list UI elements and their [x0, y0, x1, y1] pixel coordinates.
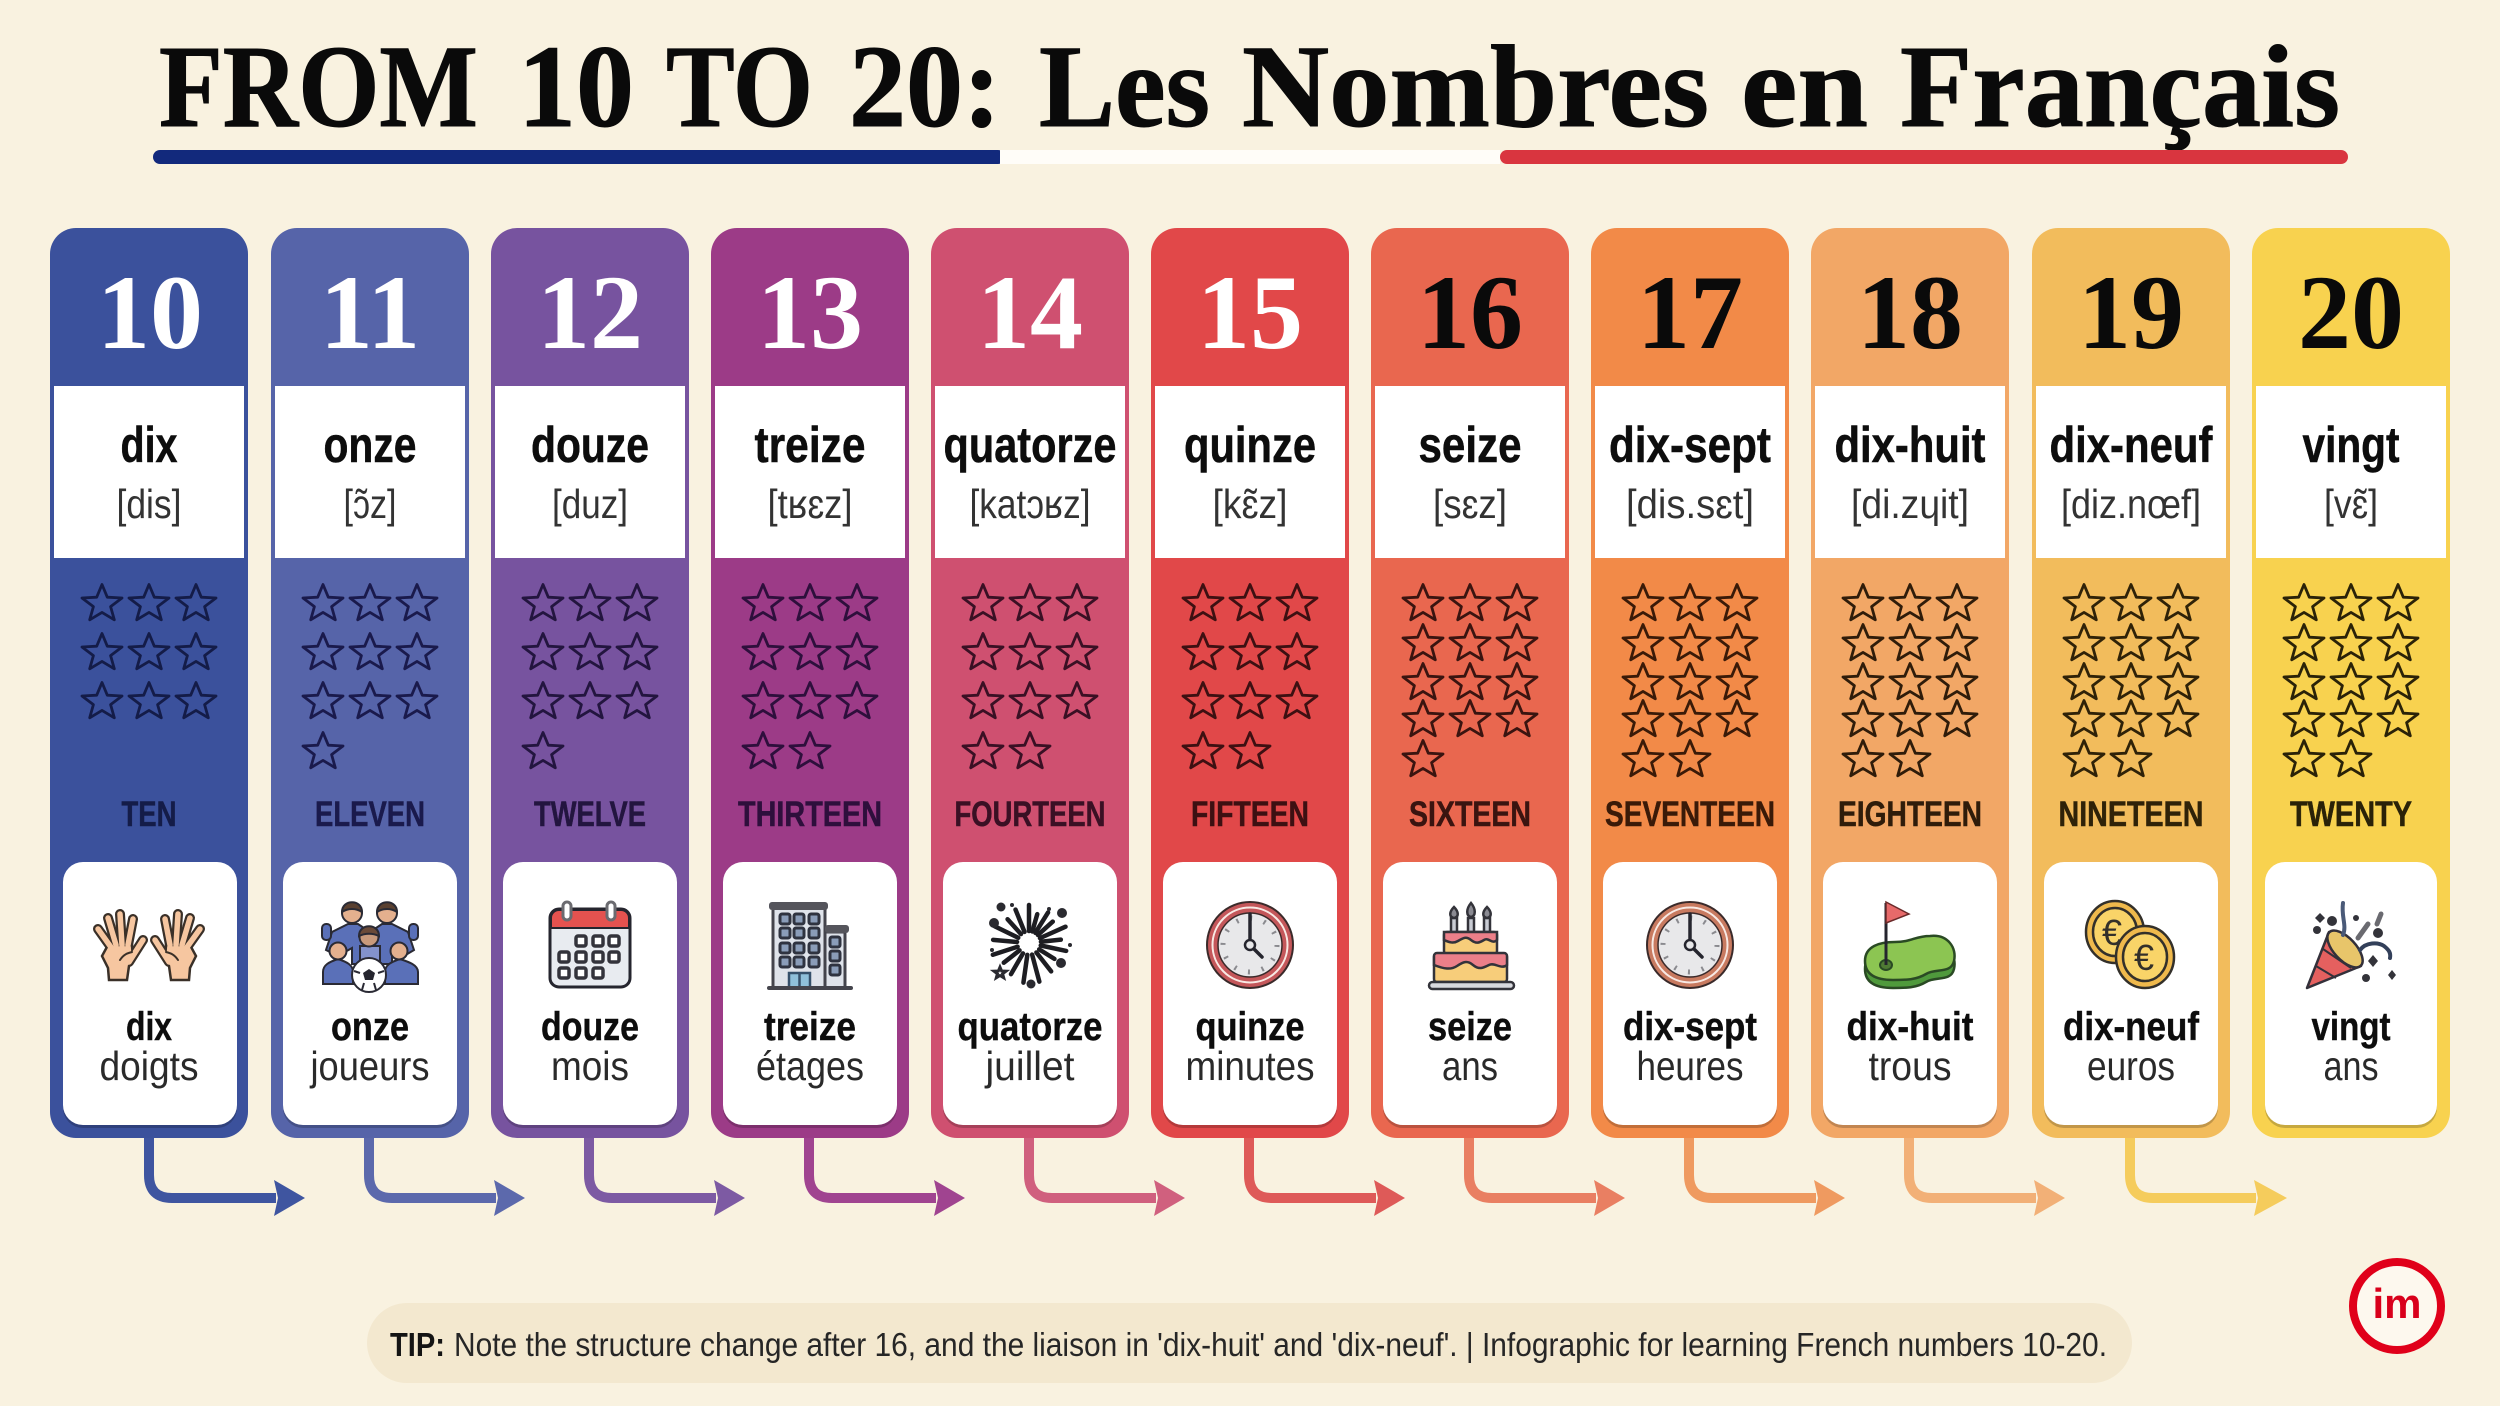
number: 15	[1197, 254, 1303, 371]
example text	[1846, 1005, 1974, 1089]
column background	[2252, 228, 2450, 1138]
word band: [sɛz]	[1433, 481, 1507, 527]
english label: SEVENTEEN	[1605, 795, 1775, 834]
panel: 14 quatorze	[931, 228, 1129, 1138]
word band: [dis]	[116, 481, 182, 527]
number: 10	[97, 254, 203, 371]
number: 18	[1857, 254, 1963, 371]
word band: [ɔ̃z]	[344, 481, 396, 527]
english label: THIRTEEN	[738, 795, 882, 834]
example text: seize	[1428, 1005, 1512, 1049]
word band: [di.zɥit]	[1851, 481, 1969, 527]
column background	[711, 228, 909, 1138]
example text	[756, 1005, 864, 1089]
word band: dix-neuf	[2050, 417, 2213, 473]
example card	[2265, 862, 2437, 1128]
panel: 18 dix-huit	[1811, 228, 2009, 1138]
example text	[100, 1005, 198, 1089]
word band	[1595, 386, 1785, 558]
arrow: 11 to 12	[369, 1138, 525, 1216]
example text: dix-huit	[1846, 1005, 1974, 1049]
stars: 14	[2064, 584, 2198, 776]
number: 20	[2298, 254, 2404, 371]
column background	[1371, 228, 1569, 1138]
example text: onze	[331, 1005, 409, 1049]
panel: 19 dix-neuf	[2032, 228, 2230, 1138]
english label: NINETEEN	[2058, 795, 2204, 834]
example text: quatorze	[958, 1005, 1102, 1049]
word band: dix-huit	[1834, 417, 1986, 473]
example text: douze	[541, 1005, 639, 1049]
word band: douze	[531, 417, 649, 473]
stars: 14	[1843, 584, 1977, 776]
english label: FOURTEEN	[954, 795, 1106, 834]
english label: FIFTEEN	[1191, 795, 1309, 834]
title	[159, 21, 2340, 152]
word band: quatorze	[944, 417, 1116, 473]
number: 16	[1417, 254, 1523, 371]
word band: dix-sept	[1609, 417, 1771, 473]
panel: 16 seize	[1371, 228, 1569, 1138]
icon: euro coins	[2086, 901, 2174, 988]
icon: clock	[1647, 902, 1733, 988]
word band	[2036, 386, 2226, 558]
example text	[1428, 1005, 1512, 1089]
number: 14	[977, 254, 1083, 371]
icon: fireworks	[989, 902, 1072, 988]
stars: 13	[1403, 584, 1537, 776]
title: en	[1741, 21, 1868, 152]
number: 11	[320, 254, 420, 371]
number: 12	[537, 254, 643, 371]
number: 17	[1637, 254, 1743, 371]
column background	[1811, 228, 2009, 1138]
panel: 20 vingt	[2252, 228, 2450, 1138]
word band	[1815, 386, 2005, 558]
title: FROM	[159, 21, 478, 152]
arrow: 19 to 20	[2130, 1138, 2287, 1216]
example card	[943, 862, 1117, 1128]
word band: treize	[754, 417, 866, 473]
logo: im	[2353, 1262, 2441, 1350]
english label: SIXTEEN	[1409, 795, 1531, 834]
word band	[54, 386, 244, 558]
arrow: 10 to 11	[149, 1138, 305, 1216]
icon: football team	[322, 902, 418, 992]
example text	[1623, 1005, 1757, 1089]
word band	[715, 386, 905, 558]
column background	[271, 228, 469, 1138]
word band: [duz]	[552, 481, 628, 527]
tip bar	[367, 1303, 2132, 1383]
panel: 11 onze	[271, 228, 469, 1138]
example text: quinze	[1196, 1005, 1304, 1049]
example text	[2312, 1005, 2390, 1089]
example card	[1163, 862, 1337, 1128]
column background	[1151, 228, 1349, 1138]
example text: ans	[1442, 1043, 1498, 1089]
stars: 10	[303, 584, 437, 768]
example text: treize	[764, 1005, 856, 1049]
arrow: 12 to 13	[589, 1138, 745, 1216]
word band	[1155, 386, 1345, 558]
example text: doigts	[100, 1043, 198, 1089]
title: Nombres	[1242, 21, 1709, 152]
tip bar: TIP:	[390, 1326, 445, 1363]
example text: dix	[126, 1005, 172, 1049]
column background	[491, 228, 689, 1138]
word band: dix	[120, 417, 178, 473]
panel: 10 dix	[50, 228, 248, 1138]
column background	[2032, 228, 2230, 1138]
word band	[495, 386, 685, 558]
english label: TWENTY	[2290, 795, 2412, 834]
title underline: French tricolour	[153, 150, 2348, 164]
example text: ans	[2324, 1043, 2378, 1089]
word band: vingt	[2302, 417, 2400, 473]
stars: 14	[2284, 584, 2418, 776]
arrow: 17 to 18	[1689, 1138, 1845, 1216]
icon: euro coins: €	[2102, 912, 2122, 953]
stars: 14	[1623, 584, 1757, 776]
icon: clock	[1207, 902, 1293, 988]
word band	[275, 386, 465, 558]
word band	[1375, 386, 1565, 558]
column background	[50, 228, 248, 1138]
icon: building	[769, 902, 851, 988]
example card	[503, 862, 677, 1128]
example text: dix-sept	[1623, 1005, 1757, 1049]
word band: [katɔʁz]	[970, 481, 1090, 527]
title: Français	[1900, 21, 2340, 152]
arrow: 16 to 17	[1469, 1138, 1625, 1216]
word band: onze	[324, 417, 416, 473]
column background	[931, 228, 1129, 1138]
example text: minutes	[1186, 1043, 1314, 1089]
title: 10	[518, 21, 634, 152]
example card	[723, 862, 897, 1128]
panel: 13 treize	[711, 228, 909, 1138]
word band: [diz.nœf]	[2061, 481, 2201, 527]
panel: 12 douze	[491, 228, 689, 1138]
icon: golf flag	[1865, 902, 1955, 988]
word band	[935, 386, 1125, 558]
logo: im: im	[2372, 1280, 2422, 1327]
example card	[1603, 862, 1777, 1128]
example text: trous	[1868, 1043, 1952, 1089]
stars: 10	[523, 584, 657, 768]
example card	[2044, 862, 2218, 1128]
stars: 9	[82, 584, 216, 718]
example text	[541, 1005, 639, 1089]
english label: ELEVEN	[315, 795, 425, 834]
example card	[1383, 862, 1557, 1128]
example text: vingt	[2312, 1005, 2390, 1049]
icon: party popper	[2307, 903, 2396, 988]
word band: quinze	[1184, 417, 1316, 473]
word band: seize	[1418, 417, 1522, 473]
panel: 15 quinze	[1151, 228, 1349, 1138]
word band: [kɛ̃z]	[1212, 481, 1288, 527]
word band: [tʁɛz]	[768, 481, 852, 527]
example text: étages	[756, 1043, 864, 1089]
title: 20:	[849, 21, 1001, 152]
stars: 11	[743, 584, 877, 768]
example text	[958, 1005, 1102, 1089]
stars: 11	[963, 584, 1097, 768]
word band: [vɛ̃]	[2324, 481, 2378, 527]
arrow: 15 to 16	[1249, 1138, 1405, 1216]
panel: 17 dix-sept	[1591, 228, 1789, 1138]
arrow: 14 to 15	[1029, 1138, 1185, 1216]
stars: 11	[1183, 584, 1317, 768]
icon: calendar	[550, 902, 630, 987]
example card	[63, 862, 237, 1128]
example card	[283, 862, 457, 1128]
arrow: 18 to 19	[1909, 1138, 2065, 1216]
tip bar: Note the structure change after 16, and the liaison in 'dix-huit' and 'dix-neuf'. | Infographic for learning French numbers 10-20.	[454, 1326, 2107, 1363]
example text	[1186, 1005, 1314, 1089]
english label: TWELVE	[534, 795, 646, 834]
example text	[310, 1005, 430, 1089]
example text: heures	[1636, 1043, 1744, 1089]
english label: TEN	[122, 795, 176, 834]
example text: dix-neuf	[2063, 1005, 2200, 1049]
example text	[2063, 1005, 2200, 1089]
example text: mois	[551, 1043, 629, 1089]
example text: juillet	[985, 1043, 1075, 1089]
number: 13	[757, 254, 863, 371]
number: 19	[2078, 254, 2184, 371]
english label: EIGHTEEN	[1838, 795, 1982, 834]
example text: joueurs	[310, 1043, 430, 1089]
icon: birthday cake	[1429, 903, 1514, 989]
arrow: 13 to 14	[809, 1138, 965, 1216]
word band: [dis.sɛt]	[1626, 481, 1754, 527]
example card	[1823, 862, 1997, 1128]
word band	[2256, 386, 2446, 558]
icon: hands	[98, 914, 200, 980]
example text: euros	[2087, 1043, 2175, 1089]
title: Les	[1039, 21, 1210, 152]
icon: euro coins: €	[2134, 937, 2154, 978]
title: TO	[666, 21, 813, 152]
column background	[1591, 228, 1789, 1138]
